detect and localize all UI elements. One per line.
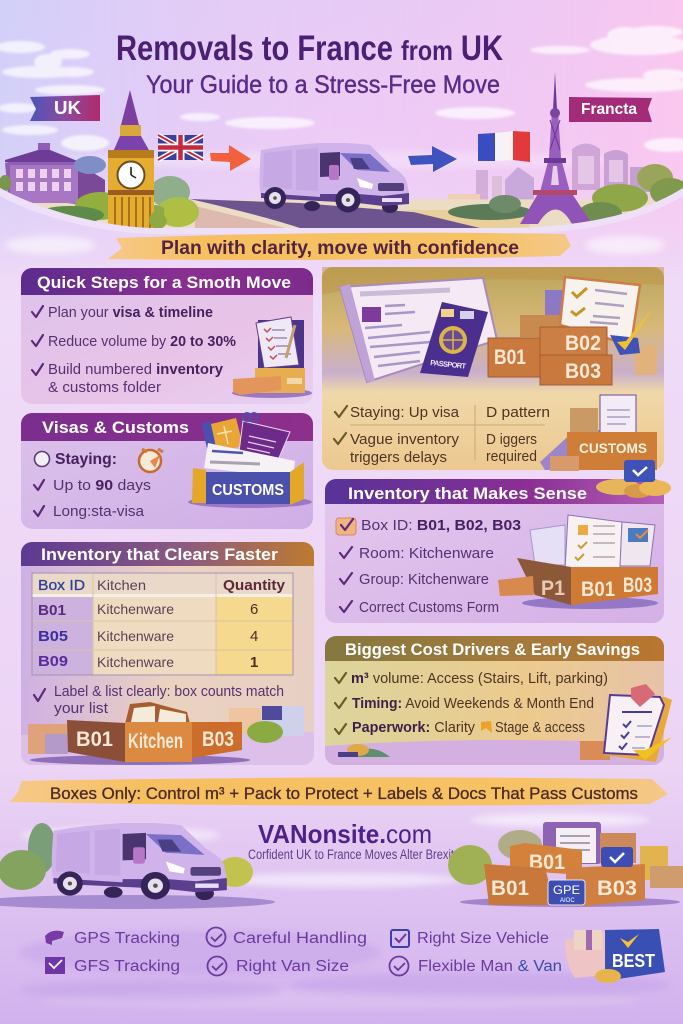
table: inventory: Kitchenware [97, 654, 174, 670]
UK label: UK [54, 98, 81, 118]
badge: best: BEST [612, 951, 655, 971]
banner: boxes only: Boxes Only: Control m³ + Pack to Protect + Labels & Docs That Pass Customs [50, 785, 638, 803]
note [34, 683, 284, 717]
note: Label & list clearly: box counts match [54, 683, 284, 700]
panel: documents and boxes [322, 267, 664, 471]
list: Reduce volume by 20 to 30% [48, 333, 236, 350]
icon: tape rolls and check [596, 460, 671, 498]
list: Group: Kitchenware [359, 571, 489, 588]
staying list: Long:sta-visa [53, 503, 145, 520]
note: your list [54, 700, 109, 717]
icon: kitchen boxes [28, 702, 250, 765]
icon: labelled boxes: B03 [565, 360, 601, 383]
text: staying notes: Staying: Up visa [350, 404, 460, 421]
panel: inventory that makes sense [325, 479, 664, 623]
brand: Corfident UK to France Moves Alter Brexit [248, 847, 454, 862]
banner: boxes only [10, 777, 668, 806]
boxes: footer: B01 [529, 851, 565, 874]
icon: clipboard [580, 684, 672, 762]
icon: inventory boxes: P1 [541, 577, 565, 600]
banner: tagline [108, 233, 571, 260]
banner: tagline: Plan with clarity, move with confidence [161, 238, 519, 259]
table: inventory: Quantity [223, 577, 286, 594]
list: Build numbered inventory [48, 361, 224, 378]
list: Plan your visa & timeline [48, 304, 213, 321]
staying list [34, 451, 151, 520]
table: inventory: B05 [38, 628, 68, 645]
trees left [0, 175, 199, 227]
arrow: red [210, 145, 251, 171]
table: inventory: Box ID [38, 577, 85, 594]
list [336, 517, 521, 616]
panel: inventory that clears faster [21, 542, 314, 765]
panel: cost drivers [325, 636, 672, 765]
table: inventory: 1 [250, 654, 258, 671]
table: inventory: Kitchenware [97, 628, 174, 644]
staying list: Up to 90 days [53, 477, 151, 494]
arrow: blue [408, 146, 457, 172]
icon: buildings and bush [229, 706, 304, 743]
list: Stage & access [495, 719, 585, 736]
brand [248, 819, 454, 862]
feature list: Careful Handling [233, 930, 367, 947]
boxes: footer: GPE [553, 883, 580, 897]
text: staying notes: Vague inventory [350, 431, 460, 448]
table: inventory: Kitchenware [97, 601, 174, 617]
France label: Francta [581, 101, 637, 118]
table: inventory: B09 [38, 653, 68, 670]
heading: Inventory that Clears Faster [41, 545, 278, 564]
heading: Quick Steps for a Smoth Move [37, 273, 291, 292]
panel: quick steps [21, 268, 313, 404]
road swoosh [0, 188, 683, 234]
ground and road [33, 195, 656, 228]
icon: passport [420, 302, 488, 377]
icon: inventory boxes: B01 [581, 578, 615, 601]
feature list: Right Size Vehicle [417, 930, 549, 947]
list: Box ID: B01, B02, B03 [361, 517, 521, 534]
panel: visas and customs [21, 413, 313, 529]
boxes: footer: B03 [597, 877, 637, 900]
table: inventory [32, 573, 293, 675]
feature list [45, 928, 562, 976]
Big Ben [108, 90, 154, 228]
list: & customs folder [48, 379, 161, 396]
heading: Visas & Customs [42, 418, 189, 437]
text: staying notes: triggers delays [350, 449, 447, 466]
staying list: Staying: [55, 451, 117, 468]
icon: kitchen boxes: Kitchen [128, 730, 183, 753]
text: staying notes [334, 404, 550, 466]
title: Removals to France from UK [116, 29, 503, 68]
list [32, 304, 236, 396]
icon: hill and car [338, 744, 390, 757]
UK label [30, 95, 100, 121]
table: inventory: Kitchen [97, 577, 146, 593]
icon: gps 1 [45, 931, 64, 945]
icon: labelled boxes: B01 [494, 346, 526, 369]
text: staying notes: D iggers [486, 431, 537, 448]
table: inventory: 4 [250, 628, 258, 645]
icon: check square [391, 930, 409, 947]
icon: customs crate: CUSTOMS [579, 441, 647, 456]
list: Paperwork: Clarity [352, 719, 475, 736]
feature list: Right Van Size [236, 958, 349, 975]
France label [569, 97, 652, 122]
icon: customs crate [540, 395, 657, 471]
heading: Inventory that Makes Sense [348, 484, 587, 503]
icon: paperwork [340, 278, 497, 382]
list: Correct Customs Form [359, 599, 499, 616]
badge: best [565, 929, 665, 983]
icon: Union Jack [158, 135, 203, 160]
boxes: footer: AIOC [560, 898, 575, 904]
icon: labelled boxes [488, 277, 657, 385]
icon: check circle [206, 928, 226, 946]
icon: kitchen boxes: B01 [76, 728, 113, 751]
hero scene [0, 72, 683, 240]
icon: stopwatch [139, 449, 163, 472]
icon: customs box [188, 413, 312, 508]
trees left front [149, 209, 167, 228]
trees right [578, 164, 683, 226]
icon: gps 2 [45, 957, 65, 974]
feature list: GFS Tracking [74, 958, 180, 975]
feature list: Flexible Man & Van [418, 958, 562, 975]
icon: inventory boxes [498, 515, 658, 609]
text: staying notes: D pattern [486, 404, 550, 421]
icon: check circle 3 [390, 956, 408, 976]
french city skyline [448, 144, 650, 200]
brand: VANonsite.com [258, 819, 432, 849]
icon: inventory boxes: B03 [623, 574, 652, 597]
icon: French flag [478, 131, 530, 162]
icon: customs box: CUSTOMS [212, 482, 284, 499]
table: inventory: B01 [38, 602, 66, 619]
list: Timing: Avoid Weekends & Month End [352, 695, 594, 712]
heading: Biggest Cost Drivers & Early Savings [345, 640, 640, 659]
list: Room: Kitchenware [359, 545, 494, 562]
icon: kitchen boxes: B03 [202, 728, 234, 751]
feature list: GPS Tracking [74, 930, 180, 947]
building [5, 143, 106, 205]
boxes: footer: B01 [491, 877, 529, 900]
van: footer [52, 823, 227, 900]
list: m³ volume: Access (Stairs, Lift, parking) [351, 670, 608, 687]
icon: labelled boxes: B02 [565, 332, 601, 355]
boxes: footer [448, 822, 683, 907]
list [335, 670, 608, 736]
subtitle: Your Guide to a Stress-Free Move [146, 71, 500, 99]
table: inventory: 6 [250, 601, 258, 618]
icon: checklist and boxes [232, 317, 312, 398]
trees: bottom left [0, 823, 275, 909]
icon: check circle 2 [208, 956, 226, 976]
Eiffel tower [520, 72, 592, 224]
van: hero [260, 143, 409, 213]
icon: passport: PASSPORT [430, 358, 467, 371]
text: staying notes: required [486, 448, 537, 465]
